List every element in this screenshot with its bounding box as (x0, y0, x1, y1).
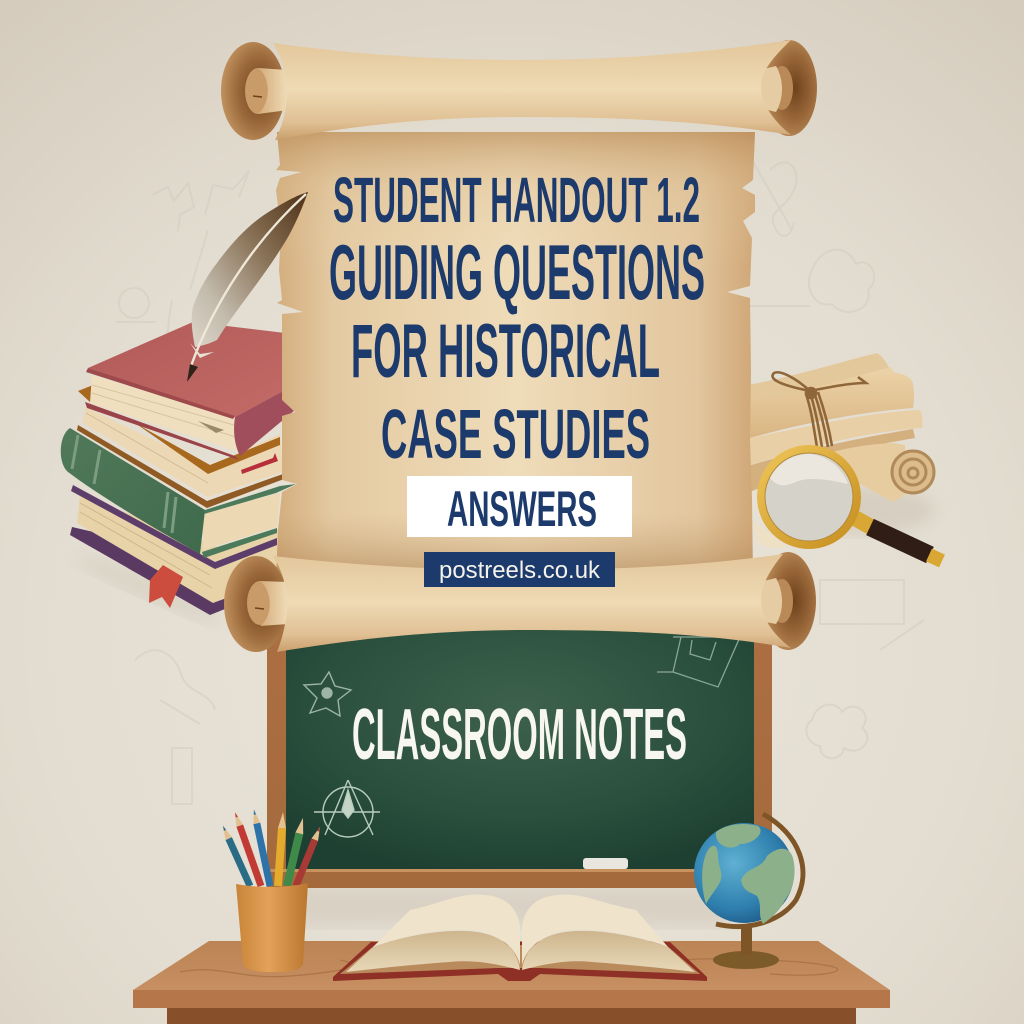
board frame (267, 622, 772, 888)
brown book cover bottom (77, 425, 284, 508)
twine (772, 372, 866, 447)
left top sheet (373, 895, 520, 965)
icon: magnifying glass (757, 445, 942, 561)
red bottom cover (85, 402, 239, 460)
cup (236, 883, 308, 972)
desk front edge (133, 990, 890, 1008)
brown top cover (78, 385, 280, 474)
red cover top (88, 322, 285, 417)
pencil yellow (274, 812, 287, 886)
back roll (737, 353, 893, 412)
pencil green (283, 817, 307, 887)
green book spine (61, 428, 205, 554)
icon: tied paper scrolls (737, 353, 935, 548)
red bookmark (241, 453, 278, 474)
middle roll (748, 367, 914, 438)
desk leg block (167, 1005, 856, 1024)
title line 4: CASE STUDIES (381, 395, 650, 473)
bottom roll: left end (224, 556, 288, 652)
icon: open book (333, 895, 707, 981)
chalk eraser (583, 858, 628, 869)
bottom roll: inner curl left (247, 581, 288, 626)
right top sheet (522, 895, 668, 965)
continents (702, 824, 795, 924)
bottom book pages (77, 495, 278, 603)
bottom roll: right end (760, 552, 816, 650)
lower dark roll (748, 429, 915, 492)
website badge: postreels.co.uk (439, 557, 601, 584)
bottom rail highlight (267, 869, 772, 872)
chalk diagram doodle (657, 637, 740, 687)
globe stand arc (716, 814, 803, 927)
chalk star doodle (304, 672, 351, 716)
globe sphere (694, 823, 794, 923)
right page block (522, 931, 695, 972)
website badge (424, 552, 615, 587)
red book spine (234, 390, 295, 456)
icon: globe (694, 814, 803, 969)
pencil blue (250, 809, 273, 887)
pencil red (232, 811, 264, 887)
shadow under board (290, 886, 730, 926)
curl spiral (892, 451, 934, 493)
green book pages (203, 493, 280, 550)
bottom roll: inner curl right (760, 578, 793, 624)
left page block (346, 931, 520, 972)
green top and strip (202, 484, 296, 558)
pale curled paper (753, 520, 787, 548)
curled roll body (833, 443, 905, 502)
cover (333, 942, 707, 981)
top roll: inner curl right (760, 66, 793, 112)
top roll: inner curl left (245, 68, 288, 114)
top roll: main (273, 40, 791, 140)
globe base (713, 951, 779, 969)
board surface (286, 622, 754, 870)
third roll (747, 410, 923, 466)
faint background sketches (116, 160, 924, 804)
icon: stack of books (61, 322, 296, 632)
icon: quill feather (187, 192, 308, 382)
icon: pencils in cup (220, 809, 323, 972)
scroll body (276, 132, 755, 580)
desk top surface (133, 941, 890, 990)
purple upper cover (71, 485, 277, 569)
answers badge: ANSWERS (447, 481, 597, 537)
ribbon bookmark (149, 565, 183, 608)
brown book pages (83, 407, 283, 497)
panel: blackboard (267, 622, 772, 888)
chalk compass doodle (314, 780, 380, 837)
panel: parchment scroll: FOR HISTORICAL (351, 309, 660, 394)
top roll: left end (221, 42, 285, 140)
bottom roll: main (273, 554, 791, 652)
red book pages (90, 375, 237, 451)
panel: parchment scroll (221, 40, 817, 652)
pencil teal (220, 824, 253, 887)
pencil dark red (293, 825, 323, 887)
bottom book purple cover (70, 527, 280, 615)
panel: desk (133, 941, 890, 1024)
top roll: right end (761, 40, 817, 136)
answers badge (407, 476, 632, 537)
